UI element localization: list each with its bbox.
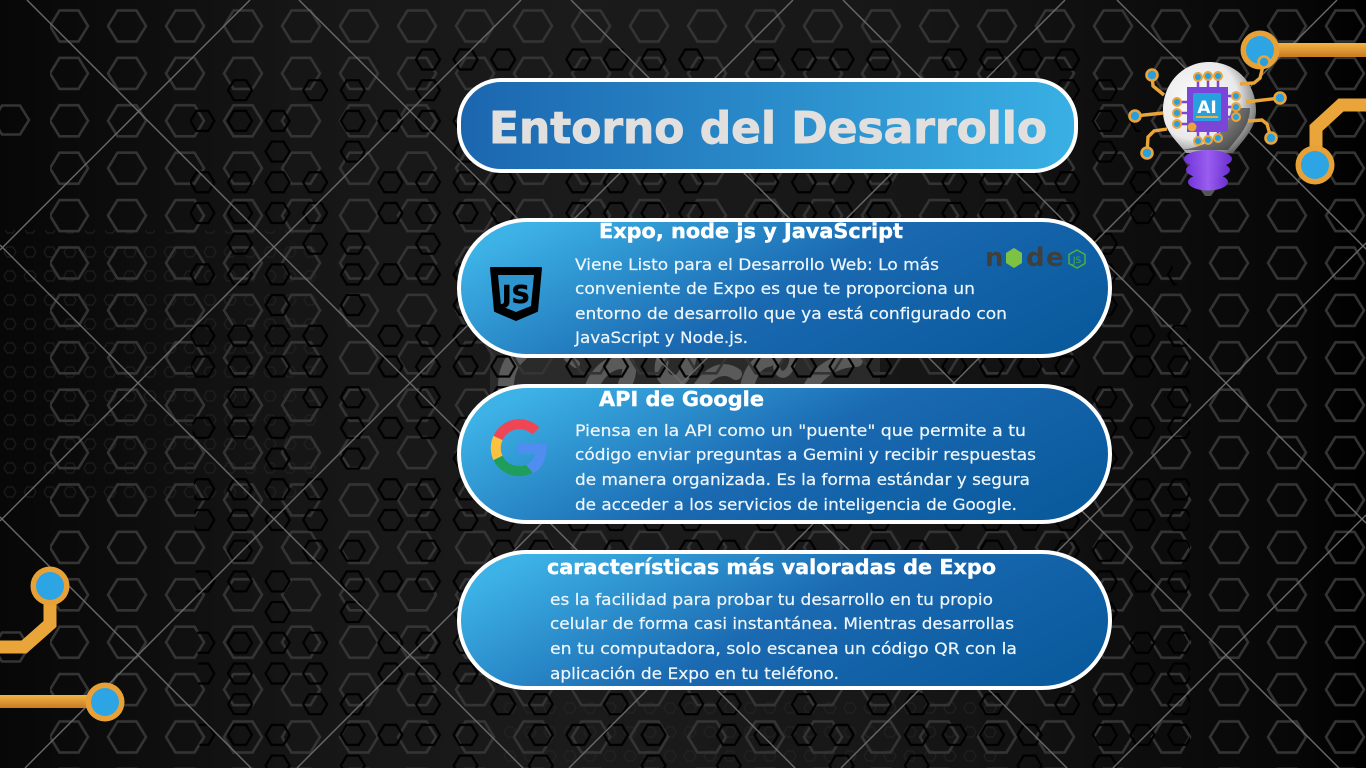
icon: Google G bbox=[496, 424, 547, 473]
text block: API description: de manera organizada. Es la forma estándar y segura bbox=[575, 470, 1030, 489]
icon: AI light bulb bbox=[1130, 56, 1286, 196]
icon: Node.js logo: nde bbox=[985, 243, 1064, 273]
text block: API description bbox=[575, 421, 1036, 514]
text block: Expo features description: celular de forma casi instantánea. Mientras desarrollas bbox=[550, 614, 1014, 633]
panel: API de Google bbox=[459, 386, 1110, 522]
circuit: top right bbox=[1240, 30, 1366, 184]
panel: Expo, node js y JavaScript bbox=[459, 219, 1110, 356]
icon: Node.js logo: JS bbox=[1072, 256, 1081, 266]
text block: Expo description: Viene Listo para el Desarrollo Web: Lo más bbox=[575, 255, 939, 274]
icon: JavaScript shield: JS bbox=[500, 280, 530, 309]
text block: API description: Piensa en la API como un "puente" que permite a tu bbox=[575, 421, 1026, 440]
text block: API description: código enviar preguntas a Gemini y recibir respuestas bbox=[575, 445, 1036, 464]
text block: Expo features description: en tu computadora, solo escanea un código QR con la bbox=[550, 639, 1017, 658]
text block: Expo features description: aplicación de Expo en tu teléfono. bbox=[550, 664, 839, 683]
title: Entorno del Desarrollo bbox=[489, 103, 1047, 154]
text block: Expo features description bbox=[550, 590, 1017, 683]
text block: Expo description bbox=[574, 255, 1007, 347]
text block: Expo description: conveniente de Expo es que te proporciona un bbox=[575, 279, 975, 298]
text block: Expo features description: es la facilidad para probar tu desarrollo en tu propio bbox=[550, 590, 993, 609]
title bbox=[459, 80, 1076, 171]
icon: AI light bulb: AI bbox=[1197, 98, 1217, 118]
text block: Expo description: entorno de desarrollo que ya está configurado con bbox=[575, 304, 1007, 323]
heading: API de Google: API de Google bbox=[599, 387, 764, 411]
heading: Expo, node js y JavaScript: Expo, node js y JavaScript bbox=[599, 219, 903, 243]
text block: API description: de acceder a los servicios de inteligencia de Google. bbox=[575, 495, 1017, 514]
panel: características más valoradas de Expo bbox=[459, 552, 1110, 688]
heading: características más valoradas de Expo: características más valoradas de Expo bbox=[547, 555, 996, 579]
circuit: bottom left bbox=[0, 566, 124, 722]
text block: Expo description: JavaScript y Node.js. bbox=[574, 328, 748, 347]
icon: JavaScript shield bbox=[491, 268, 541, 320]
